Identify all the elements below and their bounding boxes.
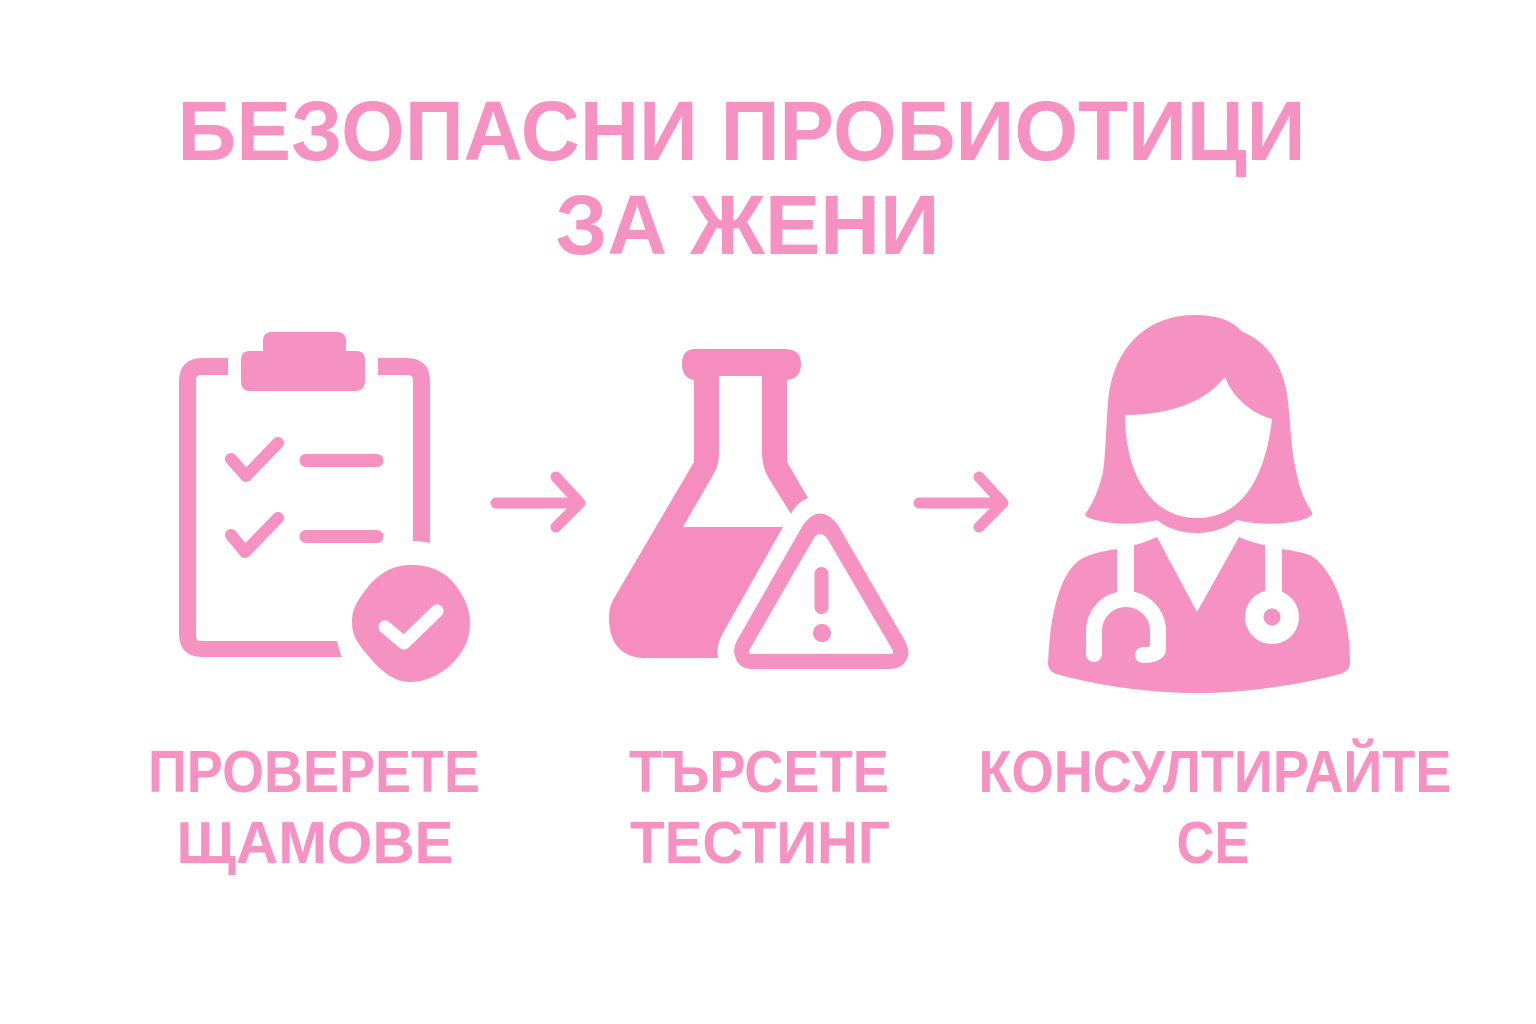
arrow: step two to step three: [919, 477, 1003, 527]
label: look for testing: [629, 739, 890, 876]
title: БЕЗОПАСНИ ПРОБИОТИЦИ: [178, 84, 1306, 178]
arrow: step one to step two: [496, 477, 580, 527]
label: check strains: ЩАМОВЕ: [176, 810, 454, 876]
label: consult a professional: КОНСУЛТИРАЙТЕ: [978, 738, 1452, 805]
icon: flask with warning: [609, 349, 908, 669]
icon: female doctor: [1048, 315, 1350, 693]
title: ЗА ЖЕНИ: [556, 178, 940, 272]
label: check strains: [148, 739, 480, 876]
label: look for testing: ТЕСТИНГ: [630, 810, 890, 876]
label: check strains: ПРОВЕРЕТЕ: [148, 739, 480, 805]
label: consult a professional: СЕ: [1176, 810, 1250, 876]
icon: clipboard checklist: [179, 332, 470, 682]
title: [178, 84, 1306, 272]
label: consult a professional: [978, 738, 1452, 876]
label: look for testing: ТЪРСЕТЕ: [629, 739, 889, 805]
